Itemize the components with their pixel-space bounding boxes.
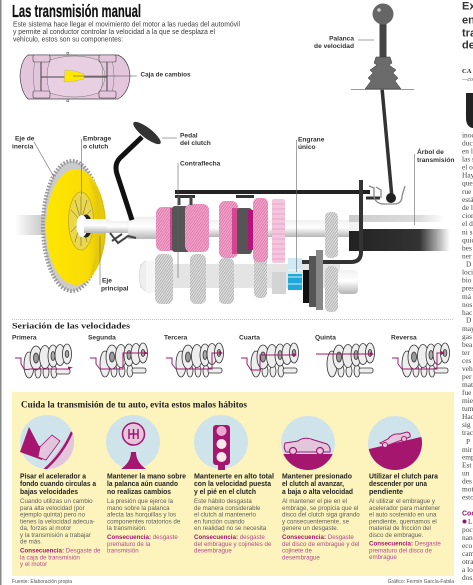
adjacent article (cropped): nan: [462, 533, 473, 542]
adjacent article (cropped): CA: [462, 68, 472, 75]
adjacent article (cropped): —co: [461, 77, 473, 83]
adjacent article (cropped): nos: [462, 300, 472, 309]
habit column 2: afecta las horquillas y los: [107, 512, 176, 518]
habit column 3: Consecuencia: desgaste: [194, 534, 265, 541]
adjacent article (cropped): fue: [462, 388, 472, 397]
icon: car on slope: [368, 416, 422, 470]
adjacent article (cropped): el o: [462, 162, 473, 172]
icon: flywheel: [43, 161, 106, 291]
adjacent article (cropped): D: [466, 316, 472, 324]
adjacent article (cropped): ner: [462, 252, 472, 260]
label: pedal del clutch: [162, 132, 211, 147]
habit column 1: Pisar el acelerador a: [20, 474, 86, 480]
counter shaft: [139, 254, 358, 304]
habit column 3: Mantenerte en alto total: [194, 474, 274, 480]
habit column 3: del embrague y cojinetes de: [194, 541, 272, 548]
adjacent article (cropped): trac: [462, 428, 473, 437]
icon: pedal: [20, 415, 74, 469]
habit column 2: no realizas cambios: [107, 489, 171, 496]
label: arbol de transmision: [414, 147, 454, 225]
habit column 4: embrage, se propicia que el: [282, 505, 358, 512]
adjacent article (cropped): P: [466, 437, 470, 446]
adjacent article (cropped): sig: [462, 420, 471, 429]
heading: seriacion de las velocidades: Seriación de las velocidades: [12, 320, 131, 330]
panel heading: Cuida la transmisión de tu auto, evita estos malos hábitos: [21, 400, 247, 410]
label: palanca de velocidad: [314, 36, 374, 50]
credit: Gráfico: Fermín García-Fabila: [388, 579, 454, 585]
habit column 2: mano sobre la palanca: [107, 505, 170, 512]
adjacent article (cropped): hac: [462, 308, 473, 317]
label: engrane unico: Engrane: [298, 136, 325, 144]
habit column 5: [369, 474, 441, 561]
habit column 3: con la velocidad puesta: [194, 481, 271, 488]
gear series: quinta: [315, 334, 374, 377]
adjacent article (cropped): veh: [462, 364, 473, 373]
habit column 3: en realidad no se necesita: [194, 525, 267, 532]
habit column 2: la palanca aún cuando: [107, 481, 178, 488]
habit column 4: disco del clutch siga girando: [282, 512, 360, 518]
adjacent article (cropped): bea: [462, 340, 473, 349]
title: Las transmisión manual: [12, 1, 141, 21]
habit column 1: da, forzas al motor: [20, 525, 71, 532]
habit column 2: La presión que ejerce la: [107, 498, 174, 505]
habit column 1: y la transmisión a trabajar: [20, 532, 91, 539]
label: arbol de transmision: transmisión: [417, 157, 454, 164]
habit column 3: [194, 474, 274, 554]
habit column 3: Este hábito desgasta: [194, 498, 252, 505]
icon: gear lever: [351, 4, 414, 204]
habit column 1: de más.: [20, 538, 42, 546]
gear series: cuarta: Cuarta: [239, 334, 260, 342]
output shaft: [349, 229, 450, 251]
icon: car top view with gearbox: [20, 52, 137, 102]
label: palanca de velocidad: Palanca: [329, 36, 354, 42]
intro text: y permite al conductor controlar la velocidad a la que se desplaza el: [13, 29, 215, 36]
habit column 2: componentes rotatorios de: [107, 518, 181, 526]
habit column 5: disco de embrague.: [369, 532, 424, 539]
habit column 4: y consecuentemente, se: [282, 518, 350, 526]
habit column 2: prematuro de la: [107, 541, 151, 548]
habit column 1: para alta velocidad (por: [20, 505, 85, 512]
adjacent article (cropped): duc: [462, 138, 473, 148]
icon: clutch disc: [68, 192, 94, 250]
gears pink: [156, 198, 285, 263]
label: contraflecha: [178, 160, 221, 278]
habit column 2: Consecuencia: desgaste: [107, 534, 178, 541]
gray gear output: [325, 212, 338, 258]
label: pedal del clutch: Pedal: [180, 132, 198, 140]
gear series: segunda: [88, 334, 148, 377]
label: caja de cambios: Caja de cambios: [140, 72, 191, 78]
habit column 2: [107, 474, 186, 554]
habit column 4: a baja o alta velocidad: [282, 489, 353, 496]
habit column 4: [282, 474, 360, 562]
label: eje de inercia: inercia: [12, 144, 34, 150]
label: pedal del clutch: del clutch: [180, 140, 211, 147]
adjacent article (cropped): el d: [462, 219, 473, 228]
adjacent article (cropped): ni s: [462, 228, 473, 236]
adjacent article (cropped): bes: [462, 244, 472, 252]
habit column 1: y el motor: [20, 561, 47, 568]
icon: traffic light: [194, 415, 248, 470]
input shaft fading: [15, 215, 45, 235]
intro text: [13, 22, 240, 44]
adjacent article (cropped): [461, 0, 473, 582]
gear series: primera: [12, 334, 73, 378]
habit column 5: el auto sostenido en una: [369, 512, 437, 518]
label: contraflecha: Contraflecha: [180, 160, 221, 168]
habit column 1: Consecuencia: Desgaste de: [20, 548, 101, 554]
label: embrague o clutch: [82, 136, 112, 195]
adjacent article (cropped): en l: [462, 146, 473, 156]
adjacent article (cropped): rue: [462, 187, 472, 196]
adjacent article (cropped): poc: [462, 525, 473, 534]
habit column 4: cojinete de: [282, 548, 312, 554]
gear series: reversa: [391, 334, 450, 377]
habit column 1: tienes la velocidad adecua-: [20, 518, 95, 526]
habit column 5: prematuro del disco de: [369, 548, 433, 554]
habit column 5: descender por una: [369, 481, 427, 488]
habit column 4: Al mantener el pie en el: [282, 498, 347, 505]
habit column 5: pendiente: [369, 489, 403, 496]
adjacent article (cropped): mie: [462, 396, 473, 405]
icon: gear knob: [106, 415, 160, 469]
label: palanca de velocidad: de velocidad: [314, 43, 354, 50]
label: eje de inercia: Eje de: [15, 136, 35, 142]
adjacent article (cropped): D: [466, 260, 472, 268]
habit column 5: acelerador para mantener: [369, 505, 440, 512]
habit column 1: ejemplo quinta) pero no: [20, 512, 86, 518]
habit column 4: del disco de embrague y del: [282, 541, 359, 548]
habit column 5: material de fricción del: [369, 525, 431, 532]
selector rod and forks: [175, 180, 380, 312]
gear series: quinta: Quinta: [315, 334, 336, 342]
panel: bad habits: [12, 392, 454, 576]
gear series: primera: Primera: [12, 334, 37, 342]
gear series: reversa: Reversa: [391, 334, 417, 342]
habit column 4: desembrague: [282, 554, 320, 562]
habit column 2: la transmisión.: [107, 525, 147, 532]
adjacent article (cropped): des: [462, 476, 472, 486]
label: embrague o clutch: o clutch: [83, 144, 108, 150]
habit column 1: fondo cuando circulas a: [20, 481, 96, 488]
label: eje principal: principal: [101, 286, 129, 292]
label: eje principal: Eje: [102, 278, 112, 284]
habit column 1: bajas velocidades: [20, 489, 78, 496]
label: arbol de transmision: Árbol de: [417, 147, 444, 156]
adjacent article (cropped): ces: [462, 356, 472, 365]
intro text: Este sistema hace llegar el movimiento del motor a las ruedas del automóvil: [13, 22, 240, 28]
habit column 3: y el pié en el clutch: [194, 489, 256, 496]
label: eje principal: [100, 236, 129, 292]
adjacent article (cropped): bio: [462, 276, 472, 284]
habit column 5: Utilizar el clutch para: [369, 474, 438, 480]
gear series: tercera: [164, 334, 224, 377]
adjacent article (cropped): ter: [462, 348, 470, 357]
adjacent article (cropped): má: [462, 292, 472, 301]
habit column 5: pendiente, quemamos el: [369, 518, 437, 526]
adjacent article (cropped): a lo: [462, 565, 473, 574]
source: Fuente: Elaboración propia: [12, 579, 72, 585]
habit column 4: genere un desgaste.: [282, 525, 339, 532]
transmission illustration: [15, 4, 450, 312]
adjacent article (cropped): per: [462, 372, 472, 381]
label: eje de inercia: [12, 136, 54, 177]
habit column 5: embrague: [369, 554, 397, 561]
adjacent article (cropped): gas: [462, 332, 472, 341]
habit column 3: en función cuando: [194, 518, 245, 526]
habit column 3: el clutch al mantenerlo: [194, 512, 256, 518]
gear series: tercera: Tercera: [164, 334, 188, 342]
adjacent article (cropped): Est: [462, 460, 472, 470]
adjacent article (cropped): L: [468, 517, 473, 526]
habit column 4: el clutch al avanzar,: [282, 481, 344, 488]
habit column 4: Consecuencia: Desgaste: [282, 534, 354, 541]
gear series: segunda: Segunda: [88, 334, 116, 342]
habit column 5: Consecuencia: Desgaste: [369, 540, 441, 548]
habit column 4: Mantener presionado: [282, 474, 352, 480]
habit column 5: Al utilizar el embrague y: [369, 498, 436, 505]
habit column 2: transmisión: [107, 548, 139, 554]
adjacent article (cropped): mat: [462, 380, 473, 389]
label: embrague o clutch: Embrage: [83, 136, 112, 142]
adjacent article (cropped): un: [462, 468, 470, 478]
label: engrane unico: único: [298, 144, 316, 151]
icon: clutch pedal: [116, 119, 163, 220]
adjacent article (cropped): de l: [462, 203, 473, 212]
clutch fork: [110, 233, 136, 243]
main shaft: [84, 219, 110, 233]
habit column 1: [20, 474, 101, 568]
habit column 1: Cuando utilizas un cambio: [20, 498, 93, 505]
habit column 3: de manera considerable: [194, 505, 261, 512]
adjacent article (cropped): que: [462, 178, 473, 188]
gear series: cuarta: [239, 334, 298, 377]
intro text: vehículo, estos son su componentes:: [13, 36, 123, 44]
label: engrane unico: [296, 136, 325, 272]
single gear cyan: [288, 258, 302, 290]
habit column 2: Mantener la mano sobre: [107, 474, 186, 480]
habit column 3: desembrague: [194, 548, 232, 554]
adjacent article (cropped): eco: [462, 541, 473, 550]
habit column 1: la caja de transmisión: [20, 554, 80, 562]
icon: car on flat road: [280, 416, 336, 472]
adjacent article (cropped): loci: [462, 268, 473, 276]
adjacent article (cropped): mir: [462, 445, 473, 454]
